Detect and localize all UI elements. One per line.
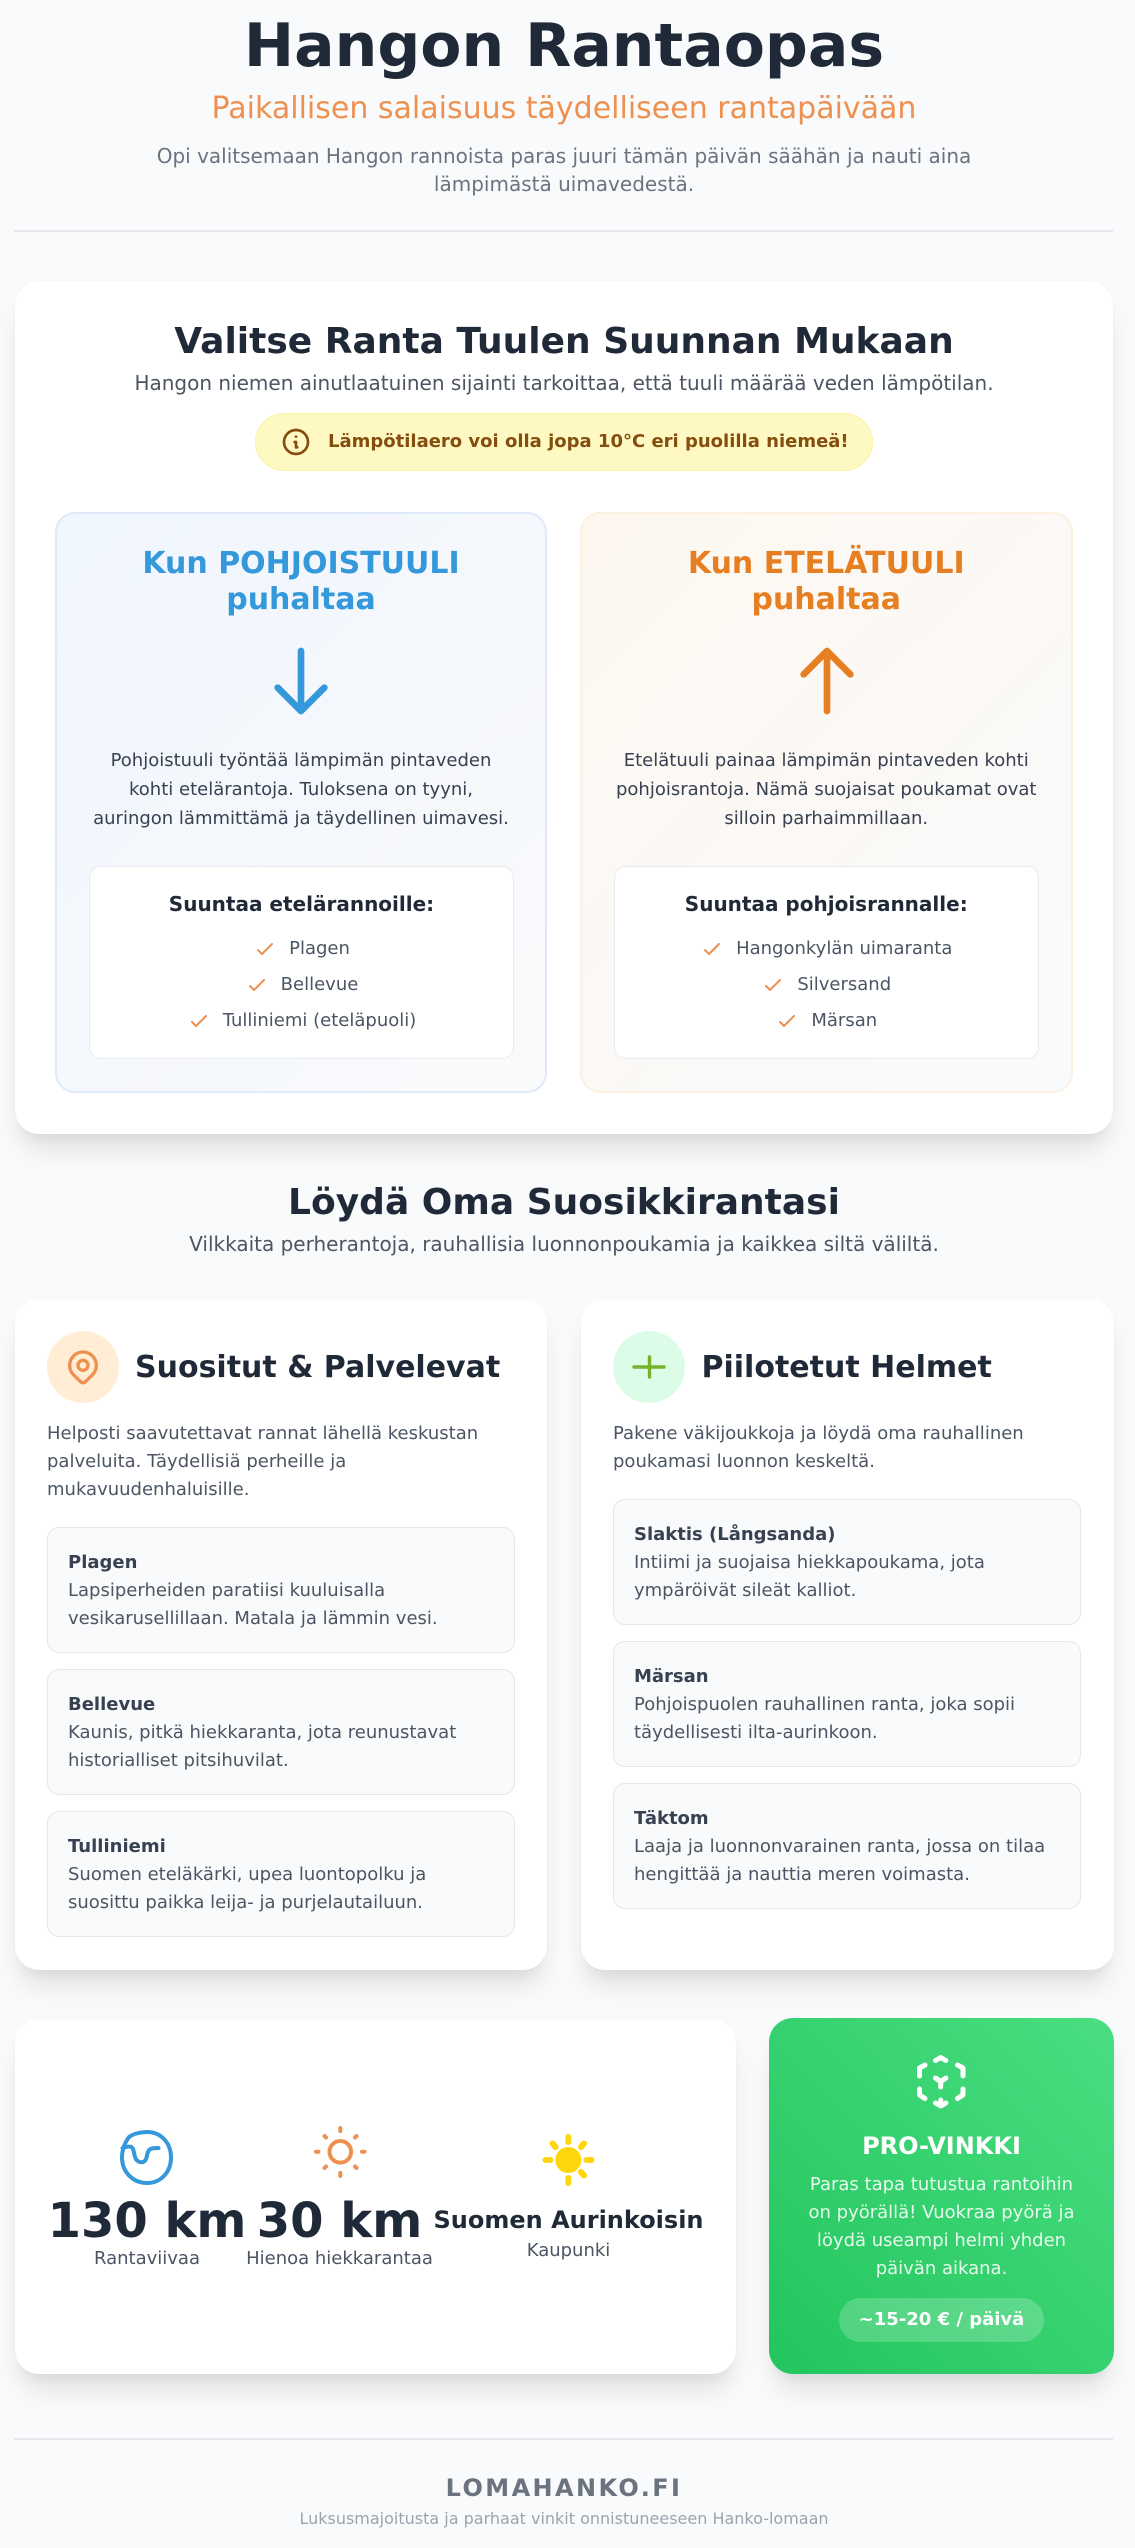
beach: Bellevue: Bellevue — [281, 974, 358, 995]
heading: south wind: Kun ETELÄTUULI — [688, 546, 965, 581]
header — [157, 10, 971, 196]
label: town: Kaupunki — [527, 2240, 610, 2261]
description: hidden gems — [613, 1423, 1024, 1472]
icon: plus — [613, 1331, 685, 1403]
heading: hidden gems: Piilotetut Helmet — [702, 1350, 992, 1385]
beach card: Tulliniemi — [47, 1811, 515, 1936]
beach card: Plagen: Lapsiperheiden paratiisi kuuluisalla — [68, 1580, 385, 1601]
description: popular beaches: mukavuudenhaluisille. — [47, 1479, 249, 1500]
beach card: Bellevue: historialliset pitsihuvilat. — [68, 1750, 289, 1771]
pro tip text — [808, 2174, 1075, 2279]
description: hidden gems: poukamasi luonnon keskeltä. — [613, 1451, 875, 1472]
icon: info — [282, 428, 310, 456]
stat: sandy beach — [246, 2126, 433, 2269]
intro text: Opi valitsemaan Hangon rannoista paras juuri tämän päivän säähän ja nauti aina — [157, 144, 971, 168]
icon: bike wheel — [917, 2055, 966, 2108]
beach card: Märsan: Pohjoispuolen rauhallinen ranta, joka sopii — [634, 1694, 1015, 1715]
description: hidden gems: Pakene väkijoukkoja ja löydä oma rauhallinen — [613, 1423, 1024, 1444]
beach: Plagen — [257, 938, 350, 959]
beach card: Tulliniemi: suosittu paikka leija- ja purjelautailuun. — [68, 1892, 423, 1913]
beach card: Bellevue — [47, 1669, 515, 1794]
panel: wind direction — [15, 281, 1113, 1134]
label: coastline: Rantaviivaa — [94, 2248, 200, 2269]
beach card: Slaktis: ympäröivät sileät kalliot. — [634, 1580, 856, 1601]
section intro: wind: Hangon niemen ainutlaatuinen sijainti tarkoittaa, että tuuli määrää veden lämpötilan. — [134, 371, 994, 395]
beach card: Täktom — [613, 1783, 1081, 1908]
beach card: Bellevue: Kaunis, pitkä hiekkaranta, jota reunustavat — [68, 1722, 456, 1743]
intro text: lämpimästä uimavedestä. — [434, 172, 694, 196]
south wind description: pohjoisrantoja. Nämä suojaisat poukamat ovat — [616, 779, 1036, 800]
list: north beaches — [614, 866, 1038, 1058]
icon: arrow up — [800, 648, 854, 714]
panel: key stats — [15, 2018, 736, 2374]
beach: Märsan — [779, 1010, 877, 1031]
pro tip text: Paras tapa tutustua rantoihin — [810, 2174, 1073, 2195]
beach card: Slaktis: Intiimi ja suojaisa hiekkapoukama, jota — [634, 1552, 985, 1573]
price pill: ~15-20 € / päivä — [859, 2309, 1024, 2330]
list: south beaches — [89, 866, 514, 1058]
heading: pro tip: PRO-VINKKI — [862, 2132, 1021, 2160]
panel: south wind — [580, 512, 1072, 1093]
south wind description: silloin parhaimmillaan. — [724, 808, 928, 829]
icon: coastline — [120, 2130, 173, 2185]
beach: Hangonkylän uimaranta: Hangonkylän uimaranta — [736, 938, 952, 959]
panel: pro tip — [769, 2018, 1114, 2374]
section heading: favourites: Löydä Oma Suosikkirantasi — [288, 1182, 840, 1222]
beach card: Plagen — [47, 1527, 515, 1652]
icon: map pin — [47, 1331, 119, 1403]
heading: south wind: puhaltaa — [751, 582, 901, 617]
beach card: Plagen: vesikarusellillaan. Matala ja lämmin vesi. — [68, 1608, 438, 1629]
beach card: Märsan: täydellisesti ilta-aurinkoon. — [634, 1722, 878, 1743]
beach: Tulliniemi: Tulliniemi (eteläpuoli) — [223, 1010, 416, 1031]
beach: Silversand: Silversand — [797, 974, 891, 995]
value: Suomen Aurinkoisin: Suomen Aurinkoisin — [433, 2206, 704, 2234]
north wind description — [93, 750, 509, 829]
heading: popular beaches: Suositut & Palvelevat — [135, 1350, 500, 1385]
beach card: Bellevue: Bellevue — [68, 1694, 155, 1715]
value: 130 km: 130 km — [48, 2193, 246, 2249]
beach card: Tulliniemi: Suomen eteläkärki, upea luontopolku ja — [68, 1864, 426, 1885]
description: popular beaches — [47, 1423, 478, 1500]
subtitle: Paikallisen salaisuus täydelliseen rantapäivään — [212, 90, 916, 126]
description: popular beaches: palveluita. Täydellisiä perheille ja — [47, 1451, 346, 1472]
pro tip text: päivän aikana. — [876, 2258, 1007, 2279]
beach card: Märsan — [613, 1641, 1081, 1766]
label: sandy beach: Hienoa hiekkarantaa — [246, 2248, 433, 2269]
pro tip text: löydä useampi helmi yhden — [817, 2230, 1066, 2251]
icon: filled sun — [542, 2134, 594, 2186]
panel: hidden gems — [581, 1299, 1114, 1970]
intro text — [157, 144, 971, 196]
heading: south wind — [688, 544, 965, 617]
beach card: Täktom: Laaja ja luonnonvarainen ranta, jossa on tilaa — [634, 1836, 1045, 1857]
section intro: favourites: Vilkkaita perherantoja, rauhallisia luonnonpoukamia ja kaikkea siltä väliltä. — [189, 1232, 939, 1256]
value: 30 km: 30 km — [257, 2193, 422, 2249]
list heading: Suuntaa pohjoisrannalle: — [685, 892, 968, 916]
beach card: Plagen: Plagen — [68, 1552, 137, 1573]
panel: north wind — [55, 512, 547, 1093]
beach card: Slaktis: Slaktis (Långsanda) — [634, 1524, 835, 1545]
north wind description: auringon lämmittämä ja täydellinen uimavesi. — [93, 808, 509, 829]
beach: Plagen: Plagen — [289, 938, 350, 959]
list heading: Suuntaa etelärannoille: — [169, 892, 434, 916]
beach: Märsan: Märsan — [811, 1010, 877, 1031]
beach card: Märsan: Märsan — [634, 1666, 709, 1687]
north wind description: Pohjoistuuli työntää lämpimän pintaveden — [111, 750, 491, 770]
description: popular beaches: Helposti saavutettavat rannat lähellä keskustan — [47, 1423, 478, 1444]
heading: north wind — [142, 546, 460, 617]
beach card: Tulliniemi: Tulliniemi — [68, 1836, 166, 1857]
callout: temperature difference — [255, 413, 873, 471]
beach card: Slaktis — [613, 1499, 1081, 1624]
icon: outline sun — [314, 2126, 366, 2178]
footer — [299, 2474, 829, 2528]
north wind description: kohti etelärantoja. Tuloksena on tyyni, — [129, 779, 473, 800]
beach card: Täktom: Täktom — [634, 1808, 709, 1829]
pro tip text: on pyörällä! Vuokraa pyörä ja — [808, 2202, 1075, 2223]
callout text: Lämpötilaero voi olla jopa 10°C eri puolilla niemeä! — [328, 431, 849, 452]
panel: popular beaches — [15, 1299, 547, 1970]
title: Hangon Rantaopas — [244, 10, 884, 80]
stat: coastline — [48, 2130, 246, 2269]
icon: arrow down — [274, 648, 328, 714]
price pill — [839, 2298, 1044, 2342]
beach card: Täktom: hengittää ja nauttia meren voimasta. — [634, 1864, 970, 1885]
heading: north wind: Kun POHJOISTUULI — [142, 546, 460, 581]
stat: sunniest town — [433, 2134, 704, 2261]
south wind description: Etelätuuli painaa lämpimän pintaveden kohti — [624, 750, 1029, 770]
south wind description — [616, 750, 1036, 829]
section heading: wind: Valitse Ranta Tuulen Suunnan Mukaan — [174, 320, 954, 362]
footer brand: LOMAHANKO.FI — [446, 2474, 682, 2502]
heading: north wind: puhaltaa — [226, 582, 376, 617]
footer tagline: Luksusmajoitusta ja parhaat vinkit onnistuneeseen Hanko-lomaan — [299, 2509, 829, 2528]
